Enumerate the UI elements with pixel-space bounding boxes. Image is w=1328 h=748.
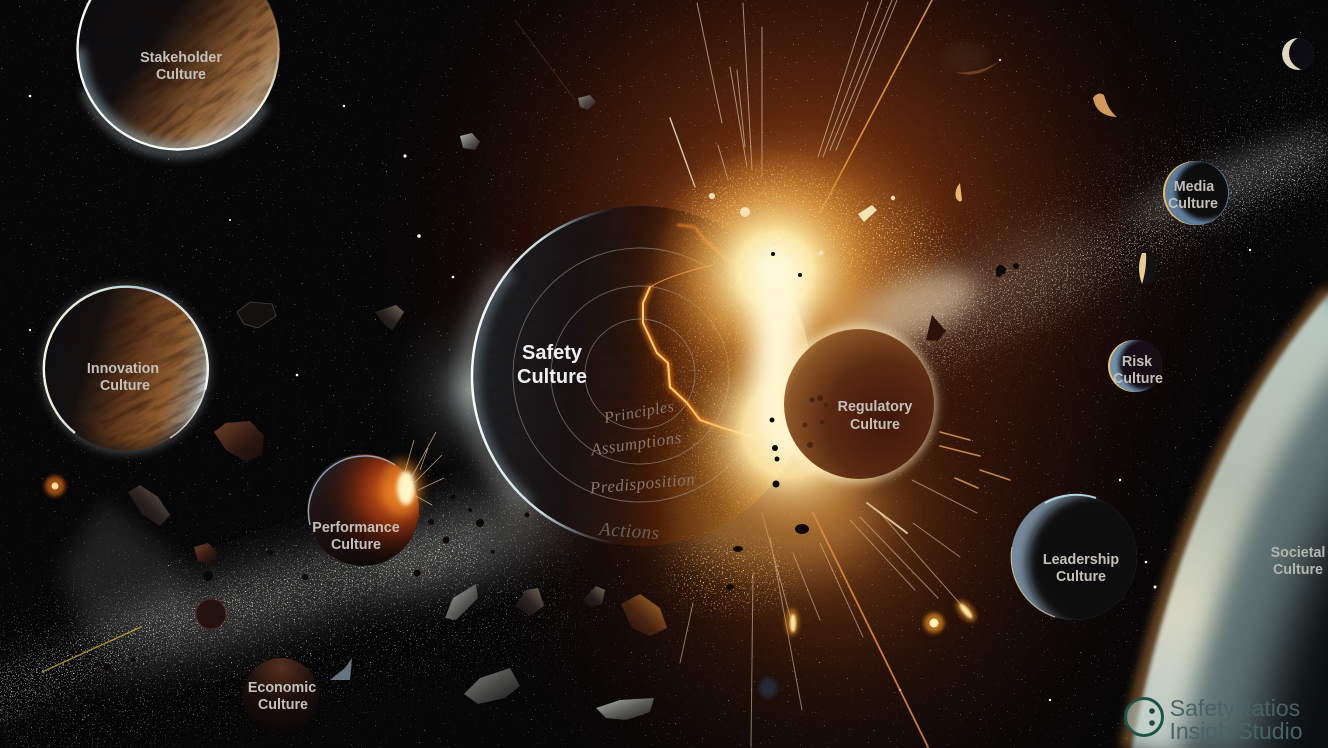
label: safety culture: Safety	[522, 342, 583, 364]
label: regulatory culture: Culture	[850, 417, 900, 433]
label: leadership culture: Leadership	[1043, 552, 1119, 568]
label: assumptions: Assumptions	[589, 428, 683, 459]
explosion burst	[640, 130, 980, 620]
label: innovation culture	[87, 361, 159, 394]
bright debris flecks	[709, 183, 962, 256]
planet: innovation culture	[36, 280, 216, 458]
small black debris	[104, 252, 1019, 670]
label: regulatory culture: Regulatory	[838, 399, 912, 415]
label: risk culture: Risk	[1122, 354, 1152, 370]
label: predisposition: Predisposition	[588, 469, 696, 498]
crescent moon	[1282, 38, 1314, 70]
rim light	[472, 207, 810, 545]
label: regulatory culture	[838, 399, 912, 433]
label: leadership culture: Culture	[1056, 569, 1106, 585]
asteroid shards right	[926, 36, 1323, 341]
planet: safety culture	[450, 206, 808, 546]
planet: regulatory culture	[778, 325, 936, 483]
label: innovation culture: Innovation	[87, 361, 159, 377]
logo text: SafetyRatios	[1170, 695, 1300, 721]
logo text: InsightStudio	[1170, 718, 1302, 744]
label: economic culture: Economic	[248, 680, 316, 696]
planet: performance culture	[300, 432, 444, 570]
label: performance culture	[312, 520, 400, 553]
label: principles: Principles	[602, 398, 676, 427]
label: safety culture: Culture	[517, 366, 587, 388]
label: societal culture: Societal	[1271, 545, 1325, 561]
asteroid cluster left	[128, 95, 596, 629]
explosion glow behind planets	[660, 165, 986, 570]
label: economic culture	[248, 680, 316, 713]
planet: economic culture	[243, 658, 319, 734]
label: media culture: Culture	[1168, 196, 1218, 212]
planet: leadership culture	[1010, 494, 1137, 620]
logo mark	[1126, 698, 1162, 736]
planet: societal culture	[1120, 280, 1328, 748]
label: media culture: Media	[1174, 179, 1215, 195]
label: performance culture: Culture	[331, 537, 381, 553]
planet: media culture	[1163, 161, 1229, 225]
asteroid cluster lower	[330, 584, 777, 720]
surface crack	[643, 225, 753, 437]
label: performance culture: Performance	[312, 520, 400, 536]
label: risk culture: Culture	[1113, 371, 1163, 387]
logo: SafetyRatios InsightStudio	[1126, 695, 1302, 744]
label: societal culture	[1271, 545, 1325, 578]
planet body	[471, 206, 811, 546]
label: stakeholder culture: Stakeholder	[140, 50, 222, 66]
glowing embers	[45, 476, 980, 636]
logo text	[1170, 695, 1302, 744]
impact flash	[382, 432, 444, 516]
smoky nebula patch	[60, 118, 1328, 681]
label: economic culture: Culture	[258, 697, 308, 713]
planet: risk culture	[1108, 340, 1162, 392]
ray streaks upper	[515, 0, 932, 213]
label: innovation culture: Culture	[100, 378, 150, 394]
atmosphere glow	[472, 270, 530, 505]
planet: stakeholder culture	[76, 0, 280, 164]
label: leadership culture	[1043, 552, 1119, 585]
label: societal culture: Culture	[1273, 562, 1323, 578]
label: stakeholder culture	[140, 50, 222, 83]
ray streaks lower	[42, 432, 1010, 747]
concentric culture rings	[513, 248, 767, 502]
label: media culture	[1168, 179, 1218, 212]
label: risk culture	[1113, 354, 1163, 387]
label: actions: Actions	[596, 519, 660, 544]
label: stakeholder culture: Culture	[156, 67, 206, 83]
label: safety culture	[517, 342, 587, 388]
